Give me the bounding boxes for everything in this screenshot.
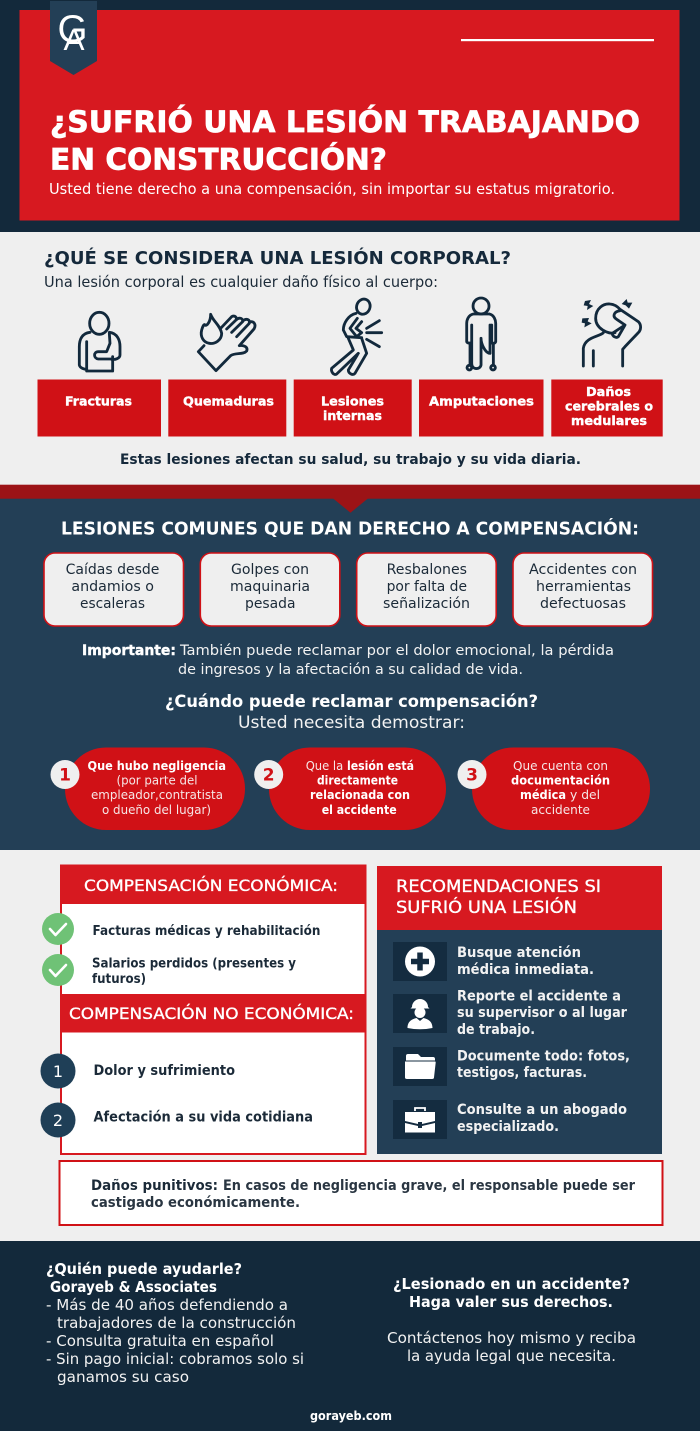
card: slips: Resbalones	[387, 562, 467, 578]
claim heading: Usted necesita demostrar:	[238, 713, 465, 733]
important note	[82, 643, 614, 678]
card: defective tools: herramientas	[536, 579, 631, 595]
injury label: amputations	[419, 380, 544, 436]
non-economic heading	[60, 994, 366, 1032]
recommendation: lawyer: Consulte a un abogado	[457, 1102, 627, 1118]
panel: bodily injury	[0, 232, 700, 485]
requirement 2: 2	[263, 766, 275, 786]
recommendation: report accident: de trabajo.	[457, 1022, 535, 1038]
requirement 3: Que cuenta con	[513, 759, 608, 773]
footer: call to action	[387, 1275, 636, 1365]
requirement 3	[458, 748, 650, 830]
card: machinery: pesada	[245, 596, 296, 612]
header panel	[0, 0, 700, 232]
requirement 1: empleador,contratista	[91, 788, 223, 802]
main title: ¿SUFRIÓ UNA LESIÓN TRABAJANDO	[50, 103, 640, 139]
recommendation: lawyer: especializado.	[457, 1119, 559, 1135]
subtitle: Usted tiene derecho a una compensación, sin importar su estatus migratorio.	[49, 180, 615, 198]
panel: compensation and recommendations	[0, 850, 700, 1241]
footer: who can help	[46, 1260, 304, 1386]
injury label: internal: internas	[323, 408, 382, 423]
item: pain: Dolor y sufrimiento	[94, 1063, 235, 1079]
callout: punitive damages: castigado económicamente.	[91, 1195, 300, 1211]
card: falls	[44, 553, 184, 626]
footer: call to action: la ayuda legal que necesita.	[407, 1347, 616, 1365]
footer: call to action: Haga valer sus derechos.	[409, 1293, 613, 1311]
claim heading	[165, 692, 538, 733]
callout: punitive damages	[60, 1161, 662, 1225]
requirement 2	[254, 748, 446, 830]
requirement 2: relacionada con	[310, 788, 410, 802]
card: machinery: maquinaria	[230, 579, 310, 595]
main title	[50, 103, 640, 176]
card: slips	[357, 553, 496, 626]
injury label: internal: Lesiones	[321, 394, 384, 409]
injury label: fractures	[38, 380, 161, 436]
footer: who can help: trabajadores de la construcción	[57, 1314, 296, 1332]
recommendation: report accident: Reporte el accidente a	[457, 989, 621, 1005]
claim heading: ¿Cuándo puede reclamar compensación?	[165, 692, 538, 711]
recommendations heading: SUFRIÓ UNA LESIÓN	[396, 896, 577, 918]
footer	[0, 1241, 700, 1431]
footer: call to action: Contáctenos hoy mismo y reciba	[387, 1329, 636, 1347]
requirement 3: 3	[466, 766, 478, 786]
item: lost wages	[42, 954, 296, 987]
closing statement: Estas lesiones afectan su salud, su trabajo y su vida diaria.	[120, 452, 581, 468]
icon: arm fracture	[79, 312, 120, 371]
injury label: brain or spinal	[551, 380, 663, 436]
injury label: brain or spinal: medulares	[571, 413, 647, 428]
requirement 3: documentación	[511, 774, 610, 788]
card: defective tools: Accidentes con	[529, 562, 637, 578]
callout: punitive damages: Daños punitivos:	[91, 1178, 218, 1194]
card: slips: por falta de	[387, 579, 467, 595]
section heading: ¿QUÉ SE CONSIDERA UNA LESIÓN CORPORAL?	[44, 247, 511, 269]
injury label: brain or spinal: cerebrales o	[565, 398, 653, 414]
recommendation: lawyer	[393, 1100, 627, 1139]
footer: who can help: ganamos su caso	[57, 1368, 189, 1386]
recommendation: medical care	[393, 942, 594, 981]
requirement 3: accidente	[531, 803, 590, 817]
footer: who can help: - Sin pago inicial: cobramos solo si	[46, 1350, 304, 1368]
requirement 3: médica	[520, 788, 566, 802]
non-economic heading: COMPENSACIÓN NO ECONÓMICA:	[69, 1004, 354, 1023]
injury label: internal	[294, 380, 412, 436]
item: daily life: Afectación a su vida cotidiana	[94, 1110, 313, 1126]
requirement 1: (por parte del	[116, 774, 198, 788]
requirement 2: directamente	[317, 774, 398, 788]
requirement 2: el accidente	[322, 803, 397, 817]
card: falls: escaleras	[80, 596, 145, 612]
main title: EN CONSTRUCCIÓN?	[50, 140, 387, 176]
requirement 2: Que la	[306, 759, 343, 773]
requirement 1	[50, 748, 245, 830]
section heading: LESIONES COMUNES QUE DAN DERECHO A COMPENSACIÓN:	[61, 518, 639, 540]
item: lost wages: futuros)	[92, 971, 146, 987]
logo banner: G	[58, 8, 88, 51]
requirement 3: y del	[570, 788, 600, 802]
section intro: Una lesión corporal es cualquier daño físico al cuerpo:	[44, 273, 438, 291]
economic heading	[60, 865, 366, 904]
footer: website: gorayeb.com	[310, 1409, 392, 1423]
footer: who can help: - Más de 40 años defendiendo a	[46, 1296, 288, 1314]
important note: Importante:	[82, 643, 176, 659]
injury label: amputations: Amputaciones	[429, 394, 534, 409]
logo banner	[50, 1, 97, 75]
important note: También puede reclamar por el dolor emocional, la pérdida	[179, 643, 614, 659]
icon: amputation	[467, 298, 496, 370]
card: defective tools: defectuosas	[540, 596, 626, 612]
item: daily life	[40, 1102, 313, 1138]
recommendation: medical care: Busque atención	[457, 945, 581, 961]
icon: head injury	[582, 299, 641, 366]
footer: who can help: - Consulta gratuita en español	[46, 1332, 274, 1350]
recommendation: document: testigos, facturas.	[457, 1065, 587, 1081]
injury label: burns: Quemaduras	[183, 394, 274, 409]
item: pain: 1	[53, 1062, 63, 1081]
recommendations heading	[377, 866, 662, 930]
requirement 2: lesión está	[347, 759, 414, 773]
injury label: burns	[168, 380, 286, 436]
economic heading: COMPENSACIÓN ECONÓMICA:	[84, 876, 338, 895]
recommendation: report accident: su supervisor o al lugar	[457, 1005, 628, 1021]
icon: internal injury	[331, 297, 382, 374]
logo banner: A	[64, 24, 84, 57]
card: machinery: Golpes con	[231, 562, 309, 578]
icon: burned hand	[198, 314, 255, 371]
recommendation: medical care: médica inmediata.	[457, 962, 594, 978]
recommendation: document: Documente todo: fotos,	[457, 1049, 630, 1065]
panel: common injuries	[0, 485, 700, 850]
requirement 1: o dueño del lugar)	[102, 803, 211, 817]
item: medical bills	[42, 913, 320, 945]
important note: de ingresos y la afectación a su calidad de vida.	[178, 662, 523, 678]
injury label: fractures: Fracturas	[65, 394, 132, 409]
card: machinery	[200, 553, 340, 626]
panel: recommendations	[377, 866, 662, 1154]
card: falls: andamios o	[71, 579, 154, 595]
injury label: brain or spinal: Daños	[586, 384, 631, 399]
footer: who can help: ¿Quién puede ayudarle?	[46, 1260, 242, 1278]
requirement 1: 1	[59, 766, 71, 786]
recommendation: report accident	[393, 989, 628, 1038]
item: medical bills: Facturas médicas y rehabilitación	[92, 923, 320, 939]
recommendations heading: RECOMENDACIONES SI	[396, 877, 601, 897]
card: slips: señalización	[383, 596, 470, 612]
recommendation: document	[393, 1047, 630, 1086]
footer: call to action: ¿Lesionado en un accidente?	[393, 1275, 630, 1293]
callout: punitive damages: En casos de negligencia grave, el responsable puede ser	[223, 1178, 635, 1194]
item: lost wages: Salarios perdidos (presentes y	[92, 956, 296, 972]
footer: who can help: Gorayeb & Associates	[50, 1278, 217, 1296]
item: pain	[40, 1054, 235, 1088]
card: falls: Caídas desde	[66, 562, 159, 578]
item: daily life: 2	[53, 1111, 63, 1130]
card: defective tools	[513, 553, 652, 626]
panel: compensation	[40, 865, 366, 1154]
requirement 1: Que hubo negligencia	[88, 759, 226, 773]
